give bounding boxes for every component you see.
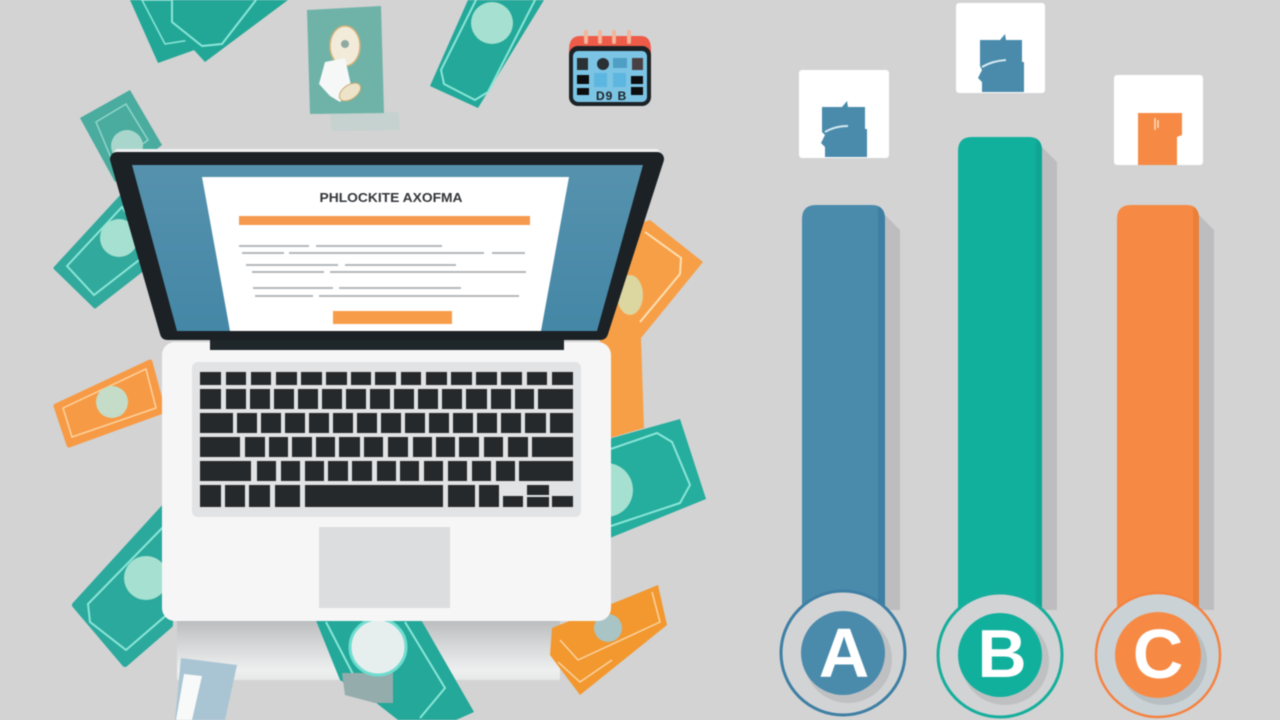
bar B edge bbox=[1036, 139, 1042, 610]
icon: orange bill right bbox=[600, 220, 703, 438]
badge C bbox=[1096, 593, 1220, 717]
bar C edge bbox=[1193, 207, 1199, 610]
card C with icon bbox=[1114, 75, 1203, 165]
bar C bbox=[1117, 205, 1214, 610]
badge C: C bbox=[1133, 615, 1183, 693]
document highlight bar bbox=[239, 216, 530, 225]
laptop floor shadow bbox=[177, 618, 560, 680]
document title: PHLOCKITE AXOFMA bbox=[320, 190, 463, 205]
bar A bbox=[802, 205, 900, 610]
badge A: A bbox=[819, 614, 869, 692]
key row 4 bbox=[200, 437, 573, 457]
key row 5 bbox=[200, 461, 573, 481]
bar B shadow bbox=[1042, 147, 1057, 610]
icon: calendar bbox=[569, 30, 651, 106]
badge B: B bbox=[977, 616, 1027, 692]
laptop bbox=[114, 149, 660, 621]
icon: faded teal bill left bbox=[80, 90, 162, 182]
icon: teal bill left bbox=[55, 192, 168, 307]
bar C shadow bbox=[1199, 215, 1214, 610]
key row 2 bbox=[200, 389, 573, 409]
keyboard well bbox=[192, 362, 581, 517]
icon: teal bills top left bbox=[130, 0, 288, 63]
card A with icon bbox=[799, 70, 889, 158]
key row 6 bbox=[200, 485, 573, 507]
icon: orange bills bottom right bbox=[550, 585, 667, 695]
bar A shadow bbox=[885, 215, 900, 610]
icon: orange bill left bbox=[56, 362, 163, 445]
icon: teal bill bottom centre bbox=[315, 618, 474, 720]
card B with icon bbox=[956, 3, 1045, 93]
laptop hinge bbox=[210, 336, 564, 350]
bar B bbox=[958, 137, 1057, 610]
badge A bbox=[781, 591, 905, 715]
bar C body bbox=[1117, 205, 1199, 610]
document button bbox=[333, 311, 452, 324]
key row 1 bbox=[200, 372, 573, 385]
icon: calendar: D9 B bbox=[596, 89, 627, 103]
icon: teal bill top centre bbox=[430, 0, 544, 108]
trackpad bbox=[319, 527, 450, 608]
document text lines bbox=[239, 245, 526, 297]
icon: teal bill right bbox=[579, 419, 706, 540]
bar A edge bbox=[878, 207, 885, 610]
icon: portrait bill top bbox=[307, 6, 400, 131]
bar B body bbox=[958, 137, 1042, 610]
keyboard bbox=[192, 362, 581, 517]
laptop screen bbox=[132, 165, 643, 331]
key row 3 bbox=[200, 413, 573, 433]
bar A body bbox=[802, 205, 885, 610]
document on screen bbox=[202, 177, 569, 331]
laptop lid rim bbox=[114, 149, 660, 157]
laptop bezel bbox=[117, 159, 657, 333]
icon: pale bill bottom left bbox=[175, 658, 237, 720]
badge B bbox=[938, 593, 1062, 717]
icon: teal bill lower left bbox=[75, 501, 170, 664]
laptop base bbox=[162, 342, 611, 621]
